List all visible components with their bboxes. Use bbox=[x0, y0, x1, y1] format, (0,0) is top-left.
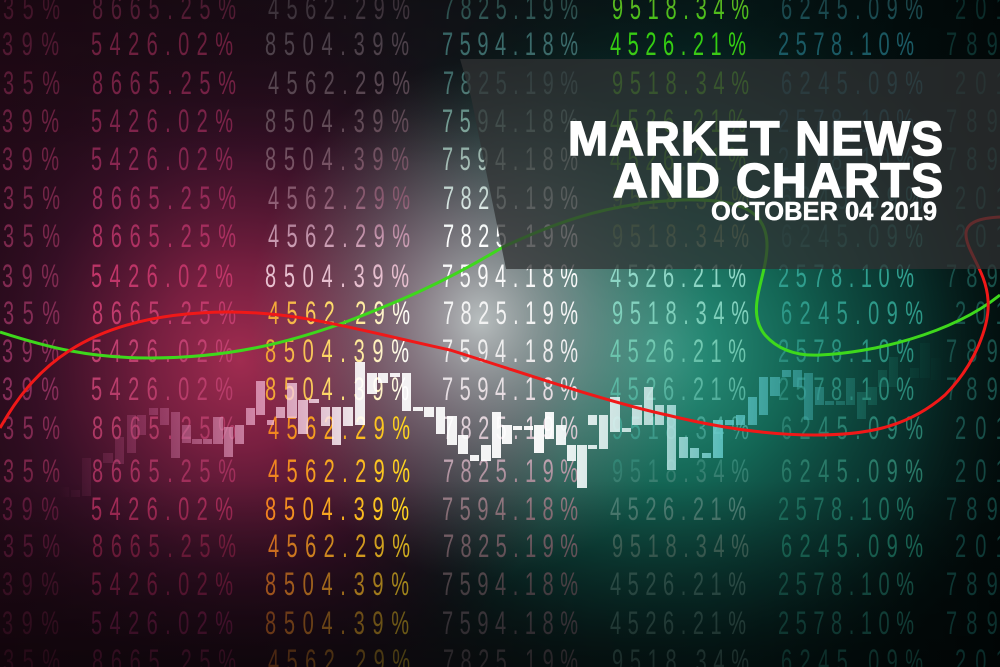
column 5: percentages: 2578.10% bbox=[778, 333, 914, 369]
column 2: percentages: 4562.29% bbox=[268, 65, 410, 101]
column 0: percentages: 35% bbox=[3, 180, 60, 216]
column 0: percentages: 39% bbox=[2, 26, 59, 62]
column 4: percentages: 9518.34% bbox=[612, 410, 749, 446]
panel: translucent title band bbox=[460, 59, 1000, 269]
column 2: percentages: 8504.39% bbox=[265, 566, 409, 602]
column 5: percentages: 2578.10% bbox=[778, 26, 914, 62]
column 3: percentages: 7825.19% bbox=[443, 410, 578, 446]
column 5: percentages: 2578.10% bbox=[778, 371, 914, 407]
column 1: percentages: 5426.02% bbox=[91, 141, 233, 177]
column 0: percentages: 35% bbox=[3, 218, 60, 254]
green trend line bbox=[0, 200, 1000, 358]
column 2: percentages: 4562.29% bbox=[268, 295, 410, 331]
column 3: percentages: 7825.19% bbox=[443, 65, 578, 101]
column 0: percentages bbox=[2, 0, 60, 667]
column 6: percentages bbox=[946, 0, 1000, 667]
column 2: percentages: 8504.39% bbox=[265, 26, 409, 62]
column 1: percentages: 8665.25% bbox=[92, 453, 236, 489]
column 4: percentages: 9518.34% bbox=[612, 453, 749, 489]
red trend line bbox=[0, 217, 1000, 435]
column 2: percentages: 8504.39% bbox=[265, 258, 409, 294]
column 3: percentages: 7825.19% bbox=[443, 180, 578, 216]
column 4: percentages: 4526.21% bbox=[610, 566, 746, 602]
column 4: percentages: 4526.21% bbox=[610, 371, 746, 407]
column 0: percentages: 39% bbox=[2, 491, 59, 527]
column 5: percentages: 6245.09% bbox=[781, 180, 923, 216]
column 1: percentages: 5426.02% bbox=[91, 103, 233, 139]
column 3: percentages: 7594.18% bbox=[442, 26, 578, 62]
column 0: percentages: 35% bbox=[3, 453, 60, 489]
column 3: percentages: 7594.18% bbox=[442, 491, 578, 527]
column 1: percentages: 8665.25% bbox=[92, 410, 236, 446]
column 5: percentages: 2578.10% bbox=[778, 141, 914, 177]
column 5: percentages: 6245.09% bbox=[781, 453, 923, 489]
column 2: percentages: 4562.29% bbox=[268, 453, 410, 489]
column 1: percentages bbox=[91, 0, 236, 667]
column 5: percentages: 2578.10% bbox=[778, 566, 914, 602]
column 0: percentages: 39% bbox=[2, 605, 59, 641]
title: MARKET NEWS bbox=[568, 113, 943, 166]
column 5: percentages: 6245.09% bbox=[781, 410, 923, 446]
column 5: percentages: 2578.10% bbox=[778, 258, 914, 294]
column 4: percentages: 4526.21% bbox=[610, 141, 746, 177]
column 1: percentages: 5426.02% bbox=[91, 566, 233, 602]
column 2: percentages: 4562.29% bbox=[268, 180, 410, 216]
column 0: percentages: 39% bbox=[2, 103, 59, 139]
column 1: percentages: 5426.02% bbox=[91, 333, 233, 369]
column 1: percentages: 5426.02% bbox=[91, 26, 233, 62]
column 4: percentages: 4526.21% bbox=[610, 605, 746, 641]
column 3: percentages: 7594.18% bbox=[442, 141, 578, 177]
column 3: percentages: 7594.18% bbox=[442, 605, 578, 641]
column 4: percentages: 9518.34% bbox=[612, 218, 749, 254]
column 0: percentages: 39% bbox=[2, 258, 59, 294]
column 0: percentages: 39% bbox=[2, 566, 59, 602]
column 4: percentages: 9518.34% bbox=[612, 180, 749, 216]
column 4: percentages: 4526.21% bbox=[610, 103, 746, 139]
column 3: percentages: 7825.19% bbox=[443, 218, 578, 254]
title bbox=[568, 113, 943, 208]
column 1: percentages: 5426.02% bbox=[91, 258, 233, 294]
column 1: percentages: 8665.25% bbox=[92, 295, 236, 331]
title: AND CHARTS bbox=[613, 155, 943, 208]
column 3: percentages: 7825.19% bbox=[443, 528, 578, 564]
column 3: percentages bbox=[442, 0, 578, 667]
column 0: percentages: 39% bbox=[2, 141, 59, 177]
column 4: percentages: 4526.21% bbox=[610, 491, 746, 527]
column 2: percentages bbox=[265, 0, 410, 667]
column 1: percentages: 5426.02% bbox=[91, 605, 233, 641]
column 4: percentages: 4526.21% bbox=[610, 258, 746, 294]
column 2: percentages: 4562.29% bbox=[268, 410, 410, 446]
column 3: percentages: 7594.18% bbox=[442, 333, 578, 369]
column 2: percentages: 8504.39% bbox=[265, 141, 409, 177]
column 2: percentages: 4562.29% bbox=[268, 528, 410, 564]
column 2: percentages: 8504.39% bbox=[265, 333, 409, 369]
column 3: percentages: 7825.19% bbox=[443, 295, 578, 331]
column 5: percentages: 2578.10% bbox=[778, 103, 914, 139]
column 5: percentages: 6245.09% bbox=[781, 65, 923, 101]
date: OCTOBER 04 2019 bbox=[711, 198, 937, 226]
column 2: percentages: 8504.39% bbox=[265, 605, 409, 641]
column 0: percentages: 39% bbox=[2, 371, 59, 407]
candlestick chart bbox=[60, 343, 941, 497]
column 4: percentages: 9518.34% bbox=[612, 295, 749, 331]
column 0: percentages: 39% bbox=[2, 333, 59, 369]
column 4: percentages: 4526.21% bbox=[610, 26, 746, 62]
column 0: percentages: 35% bbox=[3, 65, 60, 101]
column 1: percentages: 8665.25% bbox=[92, 218, 236, 254]
column 0: percentages: 35% bbox=[3, 528, 60, 564]
column 2: percentages: 8504.39% bbox=[265, 371, 409, 407]
column 2: percentages: 8504.39% bbox=[265, 491, 409, 527]
column 1: percentages: 5426.02% bbox=[91, 491, 233, 527]
column 3: percentages: 7594.18% bbox=[442, 566, 578, 602]
column 2: percentages: 4562.29% bbox=[268, 218, 410, 254]
column 4: percentages: 9518.34% bbox=[612, 528, 749, 564]
column 4: percentages: 4526.21% bbox=[610, 333, 746, 369]
column 0: percentages: 35% bbox=[3, 295, 60, 331]
column 5: percentages: 6245.09% bbox=[781, 218, 923, 254]
column 2: percentages: 8504.39% bbox=[265, 103, 409, 139]
column 0: percentages: 35% bbox=[3, 410, 60, 446]
column 5: percentages: 6245.09% bbox=[781, 295, 923, 331]
column 3: percentages: 7825.19% bbox=[443, 453, 578, 489]
column 1: percentages: 8665.25% bbox=[92, 65, 236, 101]
column 5: percentages: 6245.09% bbox=[781, 528, 923, 564]
column 1: percentages: 8665.25% bbox=[92, 528, 236, 564]
column 4: percentages: 9518.34% bbox=[612, 65, 749, 101]
column 1: percentages: 5426.02% bbox=[91, 371, 233, 407]
column 5: percentages bbox=[778, 0, 923, 667]
column 3: percentages: 7594.18% bbox=[442, 371, 578, 407]
column 5: percentages: 2578.10% bbox=[778, 491, 914, 527]
column 3: percentages: 7594.18% bbox=[442, 258, 578, 294]
column 5: percentages: 2578.10% bbox=[778, 605, 914, 641]
column 4: percentages bbox=[610, 0, 749, 667]
column 1: percentages: 8665.25% bbox=[92, 180, 236, 216]
column 3: percentages: 7594.18% bbox=[442, 103, 578, 139]
